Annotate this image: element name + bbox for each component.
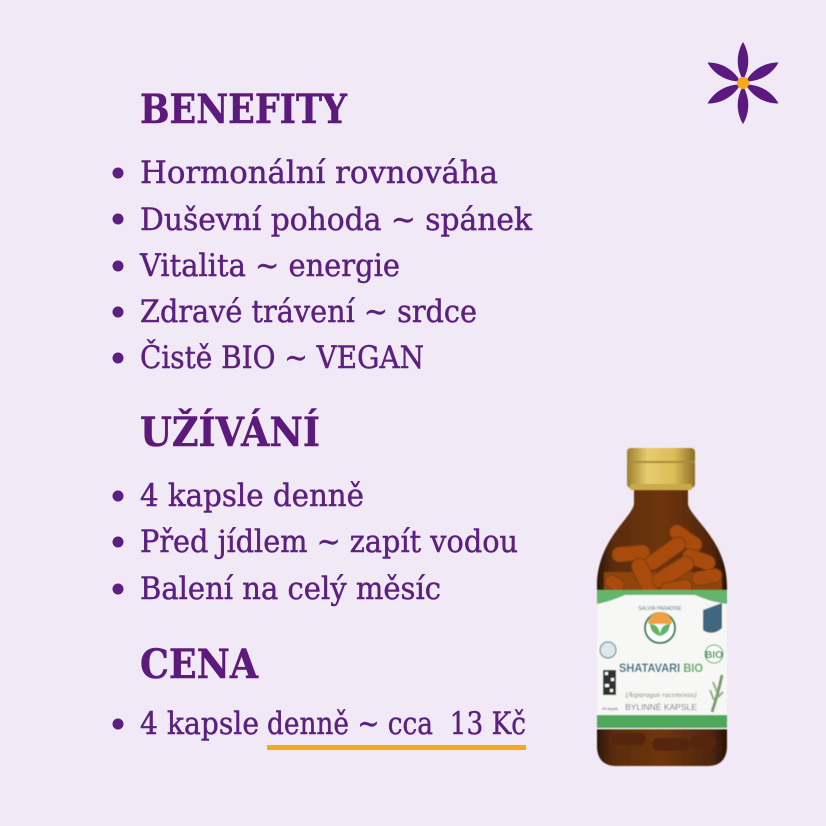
logo: SALVIA PARADISE: [638, 606, 682, 612]
herb: [712, 675, 722, 712]
list: benefits: Duševní pohoda ~ spánek: [140, 202, 532, 238]
list: price: 4 kapsle: [140, 706, 259, 742]
list: price: [112, 706, 526, 742]
list: price: denně ~ cca 13 Kč: [267, 706, 526, 742]
list: benefits: Čistě BIO ~ VEGAN: [140, 338, 424, 376]
price underline: [267, 745, 526, 750]
list: usage: [112, 478, 518, 607]
capsule type: BYLINNÉ KAPSLE: [625, 702, 697, 712]
capsules: [603, 522, 723, 600]
list: usage: Balení na celý měsíc: [140, 571, 441, 607]
label: [597, 590, 727, 729]
product name: SHATAVARI BIO: [619, 663, 703, 675]
product: bottle: [597, 448, 727, 766]
capsule count: 90 kapslí: [602, 706, 619, 711]
bottom capsules: [612, 733, 716, 751]
qr code: [603, 670, 616, 695]
latin name: (Asparagus racemosus): [625, 690, 697, 699]
list: benefits: Hormonální rovnováha: [140, 155, 498, 191]
badge left: [600, 642, 616, 658]
heading: benefity: BENEFITY: [140, 86, 347, 133]
list: benefits: Zdravé trávení ~ srdce: [140, 294, 477, 330]
badge top right: [703, 603, 722, 633]
bottle glass: [597, 488, 727, 766]
list: benefits: Vitalita ~ energie: [139, 248, 400, 284]
list: usage: Před jídlem ~ zapít vodou: [140, 524, 518, 560]
icon: purple flower: [705, 42, 781, 124]
list: benefits: [112, 155, 532, 376]
list: usage: 4 kapsle denně: [140, 478, 364, 514]
bio badge: BIO: [705, 650, 723, 661]
heading: cena: CENA: [140, 641, 259, 688]
cap: [627, 448, 695, 488]
heading: uzivani: UŽÍVÁNÍ: [140, 409, 320, 456]
